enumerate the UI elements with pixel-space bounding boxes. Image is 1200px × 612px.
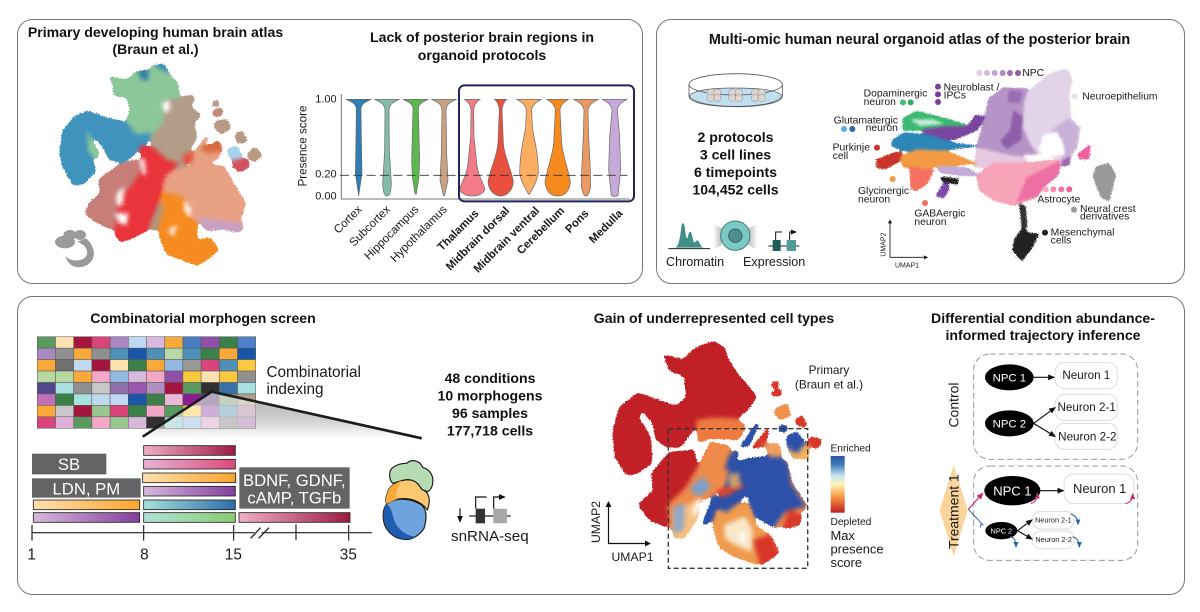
heading: primary developing human brain atlas: (Braun et al.)	[112, 41, 199, 57]
diagram: control trajectories: NPC 2	[993, 418, 1026, 430]
mesenchymal label: cells	[1051, 236, 1071, 247]
x axis labels: Subcortex	[347, 203, 393, 249]
arrows	[1034, 377, 1055, 436]
label: combinatorial indexing: Combinatorial	[266, 364, 361, 381]
UMAP: organoid atlas	[876, 68, 1116, 261]
heading: primary developing human brain atlas: Primary developing human brain atlas	[28, 24, 283, 40]
stats: morphogen screen: 96 samples	[452, 405, 528, 421]
heading: combinatorial morphogen screen: Combinatorial morphogen screen	[90, 310, 316, 326]
day labels: 35	[340, 546, 357, 563]
glutamatergic label: neuron	[866, 123, 898, 134]
UMAP axes	[881, 219, 928, 269]
UMAP: max presence score	[613, 341, 822, 566]
BDNF GDNF cAMP TGFb bar: BDNF, GDNF,	[243, 471, 346, 490]
panel: morphogen screen, cell type gain and trajectory inference	[18, 296, 1184, 594]
icon: grey developing brain	[55, 230, 94, 267]
gabaergic label: neuron	[914, 217, 947, 228]
diagram: treatment trajectories	[940, 465, 1138, 560]
colorbar legend: Max	[830, 528, 855, 543]
stats: organoid atlas: 2 protocols	[698, 129, 773, 145]
x axis labels	[331, 203, 626, 275]
threshold dashed line	[340, 174, 627, 177]
icon: gene expression	[768, 232, 799, 251]
dopaminergic label: neuron	[864, 97, 896, 108]
icon: organoid cluster	[383, 461, 433, 540]
diagram: control trajectories: Neuron 2-1	[1058, 401, 1116, 414]
heading: trajectory inference: Differential condition abundance-	[931, 310, 1155, 326]
day labels: 1	[27, 546, 36, 563]
panel: multi-omic organoid atlas: Expression	[743, 255, 805, 269]
chart: violin plot of presence score	[297, 85, 634, 275]
UMAP axes: UMAP2	[881, 232, 888, 257]
day labels: 8	[140, 546, 149, 563]
arrows	[1017, 491, 1063, 539]
day labels	[27, 546, 357, 563]
y axis labels: Presence score	[297, 105, 310, 186]
treatment diamond	[940, 465, 968, 557]
glycinergic label: neuron	[858, 194, 890, 205]
morphogen gradient bars	[33, 446, 350, 522]
nodes	[985, 364, 1034, 390]
highlight box for posterior regions	[459, 85, 634, 201]
purkinje label: Purkinje	[833, 143, 870, 154]
astrocyte label	[1037, 186, 1081, 206]
x axis labels: Hypothalamus	[388, 203, 450, 265]
label: primary reference: Primary	[809, 363, 849, 377]
heading: lack of posterior brain regions: Lack of posterior brain regions in	[370, 29, 594, 45]
panel: primary atlas and posterior brain regions	[18, 20, 642, 284]
y axis labels: 1.00	[315, 94, 337, 106]
colorbar legend: score	[830, 555, 862, 570]
label: snRNA-seq: snRNA-seq	[451, 528, 529, 545]
neuroblast label: Neuroblast /	[944, 83, 999, 94]
heading: lack of posterior brain regions: organoid protocols	[418, 47, 546, 63]
label: primary reference: (Braun et al.)	[795, 378, 863, 392]
diagram: control trajectories: Control	[946, 382, 962, 428]
glutamatergic label: Glutamatergic	[834, 115, 898, 126]
purkinje label	[833, 143, 880, 162]
NPC label	[976, 68, 1045, 79]
x axis labels: Medulla	[587, 207, 626, 246]
icon: petri dish with organoids	[689, 74, 782, 107]
SB bar	[32, 454, 106, 474]
colorbar legend: presence	[830, 541, 884, 556]
heading: gain of underrepresented cell types: Gain of underrepresented cell types	[594, 310, 834, 326]
stats: morphogen screen: 10 morphogens	[438, 388, 543, 404]
y axis labels: 0.00	[315, 190, 337, 202]
icon: chromatin peaks	[668, 223, 710, 249]
violins	[346, 99, 627, 196]
UMAP axes: UMAP1	[612, 550, 654, 564]
stats: organoid atlas: 3 cell lines	[700, 146, 771, 162]
diagram: control trajectories: Neuron 1	[1062, 369, 1110, 382]
stats: morphogen screen: 177,718 cells	[447, 422, 533, 438]
heading: multi-omic atlas: Multi-omic human neural organoid atlas of the posterior brain	[709, 32, 1130, 48]
neural crest label	[1071, 204, 1136, 223]
shaded wedge below grid	[143, 392, 422, 438]
y axis labels	[297, 94, 337, 202]
nodes: NPC 1	[993, 483, 1031, 498]
stats: organoid atlas: 104,452 cells	[692, 182, 779, 198]
diagram: treatment trajectories: Neuron 2-2	[1035, 535, 1072, 544]
y axis labels: 0.20	[315, 168, 337, 180]
NPC label: NPC	[1022, 68, 1045, 79]
legend dots and cell type labels	[833, 68, 1158, 269]
mesenchymal label: Mesenchymal	[1051, 228, 1114, 239]
grid: combinatorial indexing plate	[37, 337, 256, 428]
neural crest label: Neural crest	[1080, 204, 1136, 215]
x axis labels: Midbrain ventral	[472, 205, 542, 275]
x axis labels: Midbrain dorsal	[444, 205, 512, 273]
stats: morphogen screen: 48 conditions	[445, 370, 535, 386]
UMAP axes	[589, 501, 654, 564]
BDNF GDNF cAMP TGFb bar: cAMP, TGFb	[247, 489, 341, 508]
icon: snRNA-seq gene tracks	[460, 497, 511, 523]
diagram: morphogen timeline	[27, 446, 372, 563]
stats: organoid atlas: 6 timepoints	[694, 164, 777, 180]
neural crest label: derivatives	[1080, 212, 1129, 223]
SB bar: SB	[58, 455, 80, 474]
BDNF GDNF cAMP TGFb bar	[239, 467, 350, 509]
time axis	[32, 524, 372, 541]
LDN PM bar: LDN, PM	[53, 479, 120, 498]
heading: trajectory inference: informed trajectory inference	[945, 327, 1141, 343]
labels: chromatin and expression: Chromatin	[666, 255, 724, 269]
panel: multi-omic organoid atlas	[656, 20, 1184, 284]
label: combinatorial indexing: indexing	[266, 381, 323, 398]
colorbar legend: Enriched	[830, 444, 871, 454]
x axis labels: Hippocampus	[362, 203, 422, 263]
diagram: control trajectories: Neuron 2-2	[1058, 430, 1116, 443]
dopaminergic label	[864, 89, 927, 108]
neuroepithelium label: Neuroepithelium	[1082, 91, 1158, 102]
diagram: control trajectories	[946, 354, 1138, 459]
dopaminergic label: Dopaminergic	[864, 89, 927, 100]
nodes	[984, 476, 1040, 505]
neuroblast label	[935, 83, 999, 105]
colorbar legend	[830, 444, 884, 570]
gabaergic label	[914, 200, 965, 228]
axis lines	[341, 94, 630, 199]
gabaergic label: GABAergic	[914, 209, 965, 220]
mesenchymal label	[1042, 228, 1114, 247]
nodes: NPC 1	[993, 372, 1026, 384]
UMAP axes: UMAP1	[895, 262, 919, 269]
icon: cell	[713, 221, 757, 250]
diagram: treatment trajectories: NPC 2	[991, 526, 1012, 535]
overlay: faded grid under wedge	[156, 392, 256, 428]
purkinje label: cell	[833, 151, 848, 162]
x axis labels: Pons	[563, 208, 591, 236]
UMAP: primary brain atlas	[59, 63, 263, 266]
x axis labels: Cerebellum	[515, 205, 567, 257]
x axis labels: Cortex	[331, 203, 365, 236]
day labels: 15	[225, 546, 242, 563]
astrocyte label: Astrocyte	[1037, 195, 1081, 206]
colorbar legend: Depleted	[830, 517, 872, 528]
LDN PM bar	[32, 478, 141, 498]
dashed region of interest box	[668, 429, 808, 568]
UMAP axes: UMAP2	[589, 501, 603, 543]
glycinergic label: Glycinergic	[858, 186, 909, 197]
zoom lines from plate well	[143, 392, 422, 438]
x axis labels: Thalamus	[436, 208, 481, 254]
glycinergic label	[858, 176, 909, 205]
treatment diamond: Treatment 1	[946, 474, 962, 549]
diagram: treatment trajectories: Neuron 1	[1073, 481, 1126, 496]
diagram: treatment trajectories: Neuron 2-1	[1035, 516, 1072, 525]
neuroblast label: IPCs	[944, 90, 966, 101]
glutamatergic label	[834, 115, 898, 134]
